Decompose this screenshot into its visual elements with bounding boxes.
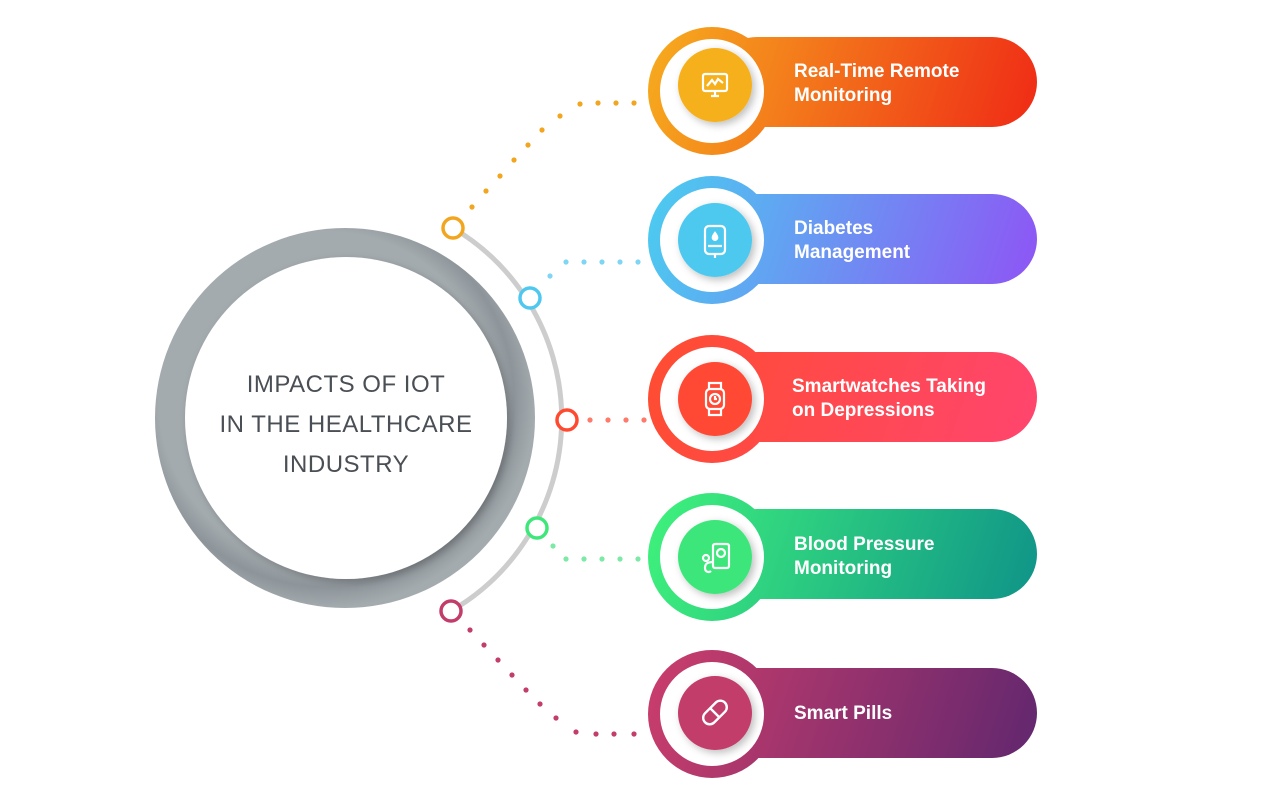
icon: blood pressure monitor [703,544,729,572]
connector dots: row 5 [467,627,637,737]
central circle: IN THE HEALTHCARE [220,411,472,438]
item 1: Real-Time Remote Monitoring [648,27,1037,155]
item 2: Diabetes Management [648,176,1037,304]
icon: smartwatch [706,383,724,415]
connector dots: row 4 [550,543,641,562]
item 3: Smartwatches Taking on Depressions [648,335,1037,463]
item 5: Smart Pills: Smart Pills [794,703,892,724]
central title: IMPACTS OF IOT [247,371,445,398]
item 4: Blood Pressure Monitoring: Blood Pressure [794,534,934,555]
item 1: Real-Time Remote Monitoring: Real-Time Remote [794,61,959,82]
item 1: Real-Time Remote Monitoring: Monitoring [794,85,892,106]
item 3: Smartwatches Taking on Depressions: on Depressions [792,400,935,421]
item 4: Blood Pressure Monitoring [648,493,1037,621]
connector dots: row 1 [469,100,637,210]
item 2: Diabetes Management: Management [794,242,911,263]
connector dots: row 3 [587,417,647,423]
central circle: INDUSTRY [283,451,409,478]
icon: monitor [703,74,727,96]
item 3: Smartwatches Taking on Depressions: Smartwatches Taking [792,376,986,397]
gray arc [451,228,562,611]
icon: pill [701,698,729,727]
node markers [441,218,577,621]
item 5: Smart Pills [648,650,1037,778]
item 2: Diabetes Management: Diabetes [794,218,873,239]
central circle [155,228,535,608]
connector dots: row 2 [547,259,641,279]
icon: glucose meter [705,226,725,258]
item 4: Blood Pressure Monitoring: Monitoring [794,558,892,579]
